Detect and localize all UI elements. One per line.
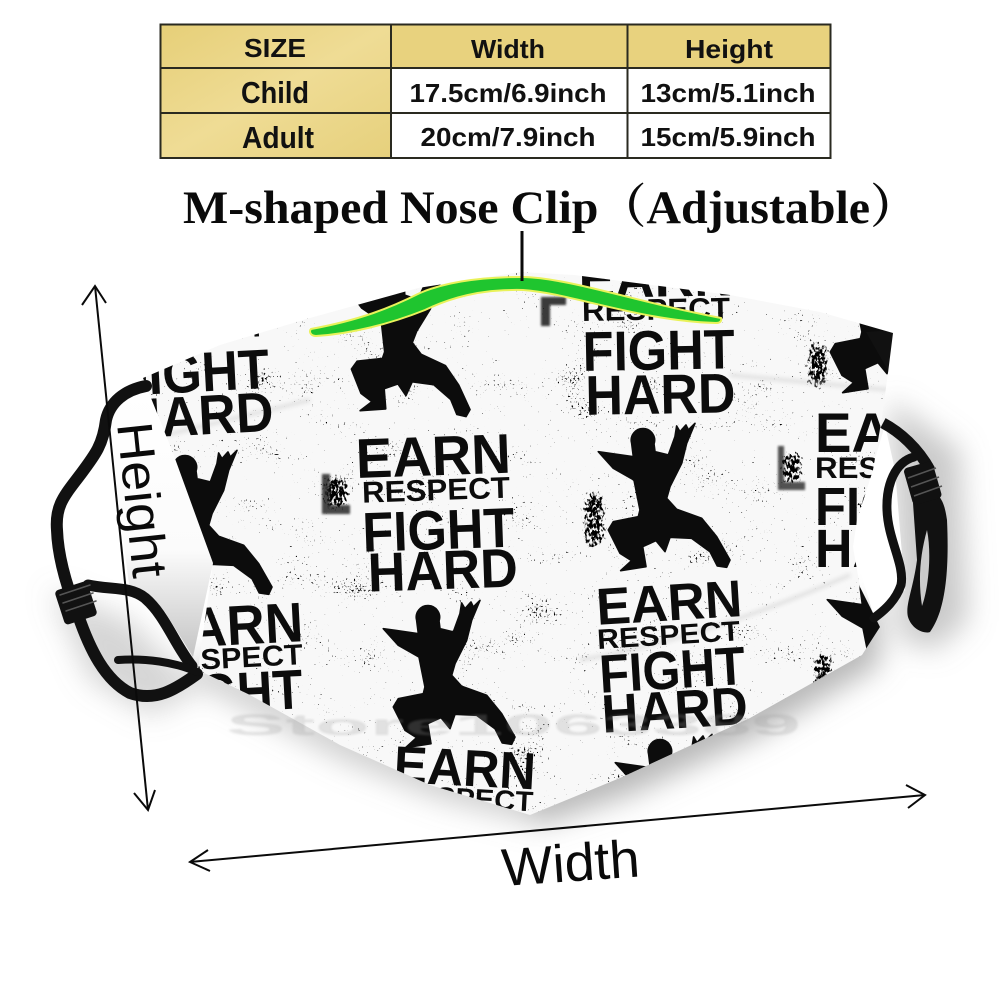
fighter: top centre: [350, 284, 471, 418]
slogan: upper left: HARD: [122, 380, 275, 451]
fighter silhouettes: [140, 245, 959, 882]
mask fold shading: [145, 375, 890, 660]
slogan: upper left: RESPECT: [117, 310, 267, 351]
right strap toggle: [903, 461, 942, 505]
slogan: upper left: [143, 333, 272, 436]
fighter: centre right: [598, 423, 730, 571]
fighter: upper right: [830, 323, 893, 394]
size table: [160, 24, 831, 158]
panel: printed mask body: [143, 272, 920, 871]
slogan: top right: [582, 276, 734, 415]
watermark: Store1063389: [226, 709, 801, 742]
slogan: right: EARN: [815, 401, 970, 464]
slogan: right: HARD: [815, 519, 965, 579]
slogan: right: [817, 414, 880, 567]
table row: child: Child: [241, 75, 309, 110]
slogan: centre: FIGHT: [361, 496, 515, 564]
fighter: lower right: [826, 584, 880, 648]
slogan: upper left: FIGHT: [116, 337, 271, 408]
slogan: centre: EARN: [355, 422, 512, 490]
slogan: upper left: EARN: [112, 260, 270, 331]
slogan: right: RESPECT: [815, 452, 963, 485]
fighter: left: [175, 450, 273, 596]
slogan: top right: FIGHT: [582, 317, 735, 383]
fighter: lower centre: [383, 600, 515, 748]
table header row: SIZE: [244, 33, 306, 63]
slogan: top right: RESPECT: [582, 292, 730, 328]
panel: mask inner flaps: [110, 392, 905, 657]
slogan: lower right: HARD: [600, 676, 749, 745]
slogan: bottom: RESPECT: [395, 779, 534, 817]
slogan: lower right: FIGHT: [598, 636, 747, 705]
nose clip pointer line: [520, 231, 524, 281]
slogan: centre: RESPECT: [361, 472, 511, 510]
left ear strap: [54, 386, 197, 696]
right ear strap: [874, 423, 948, 632]
mask drop shadow: [50, 400, 968, 825]
table header row: [244, 33, 773, 64]
corner tab upper right: [866, 330, 893, 372]
slogan: lower left: RESPECT: [157, 639, 304, 679]
slogan: lower left: EARN: [152, 590, 305, 661]
slogan: top right: HARD: [585, 361, 736, 427]
nose clip heading: M-shaped Nose Clip（Adjustable）: [183, 182, 918, 234]
table row: adult: 15cm/5.9inch: [640, 122, 816, 152]
slogan: lower right: EARN: [595, 570, 744, 637]
slogan: lower right: [598, 580, 746, 732]
slogan: bottom: [397, 746, 534, 811]
left strap toggle: [54, 581, 98, 625]
slogan: centre: HARD: [367, 536, 519, 604]
dark grunge patches: [322, 297, 805, 514]
slogan: lower left: [198, 602, 302, 710]
table row: child: 13cm/5.1inch: [640, 78, 816, 108]
fighter: bottom: [614, 734, 713, 776]
slogan: centre: [358, 434, 516, 592]
table row: adult: [242, 120, 816, 155]
slogan: lower left: FIGHT: [153, 657, 304, 728]
table row: adult: 20cm/7.9inch: [420, 122, 596, 152]
height dimension arrow: [82, 286, 155, 810]
grunge speckle texture: [151, 272, 883, 812]
table row: child: [241, 75, 816, 110]
slogan: lower right: RESPECT: [596, 615, 741, 655]
nose clip highlight: [310, 277, 721, 336]
dense grunge streaks: [322, 340, 834, 690]
table row: adult: Adult: [242, 120, 314, 155]
table row: child: 17.5cm/6.9inch: [410, 78, 606, 108]
table header row: Height: [685, 34, 773, 64]
table header row: Width: [471, 34, 545, 64]
slogan: right: FIGHT: [815, 477, 967, 537]
width dimension arrow: [190, 785, 925, 871]
height label: Height: [106, 419, 178, 580]
slogan: top right: EARN: [578, 244, 734, 310]
width label: Width: [500, 829, 642, 898]
slogan: bottom: EARN: [392, 736, 537, 801]
